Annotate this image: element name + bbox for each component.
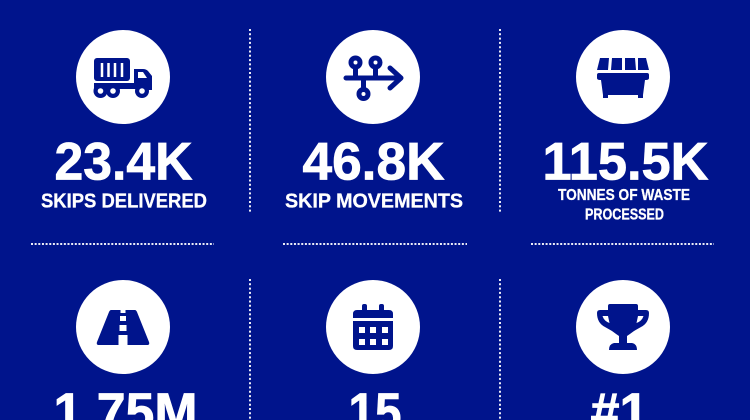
label: TONNES OF WASTE <box>558 187 690 204</box>
icon: skip bin <box>576 30 670 124</box>
panel: number one <box>576 280 670 420</box>
icon: trophy <box>576 280 670 374</box>
panel: road distance <box>54 280 198 420</box>
icon: road <box>76 280 170 374</box>
icon: calendar <box>326 280 420 374</box>
value: 23.4K <box>54 132 192 192</box>
value: 115.5K <box>542 132 708 192</box>
label line 2: PROCESSED <box>585 206 664 224</box>
panel: years <box>326 280 420 420</box>
icon: branching arrow <box>326 30 420 124</box>
panel: tonnes of waste <box>542 30 708 224</box>
icon: truck <box>76 30 170 124</box>
label: SKIPS DELIVERED <box>41 190 207 212</box>
label: SKIP MOVEMENTS <box>285 190 463 212</box>
panel: skips delivered <box>41 30 207 212</box>
panel: skip movements <box>285 30 463 212</box>
value: 46.8K <box>302 132 444 192</box>
